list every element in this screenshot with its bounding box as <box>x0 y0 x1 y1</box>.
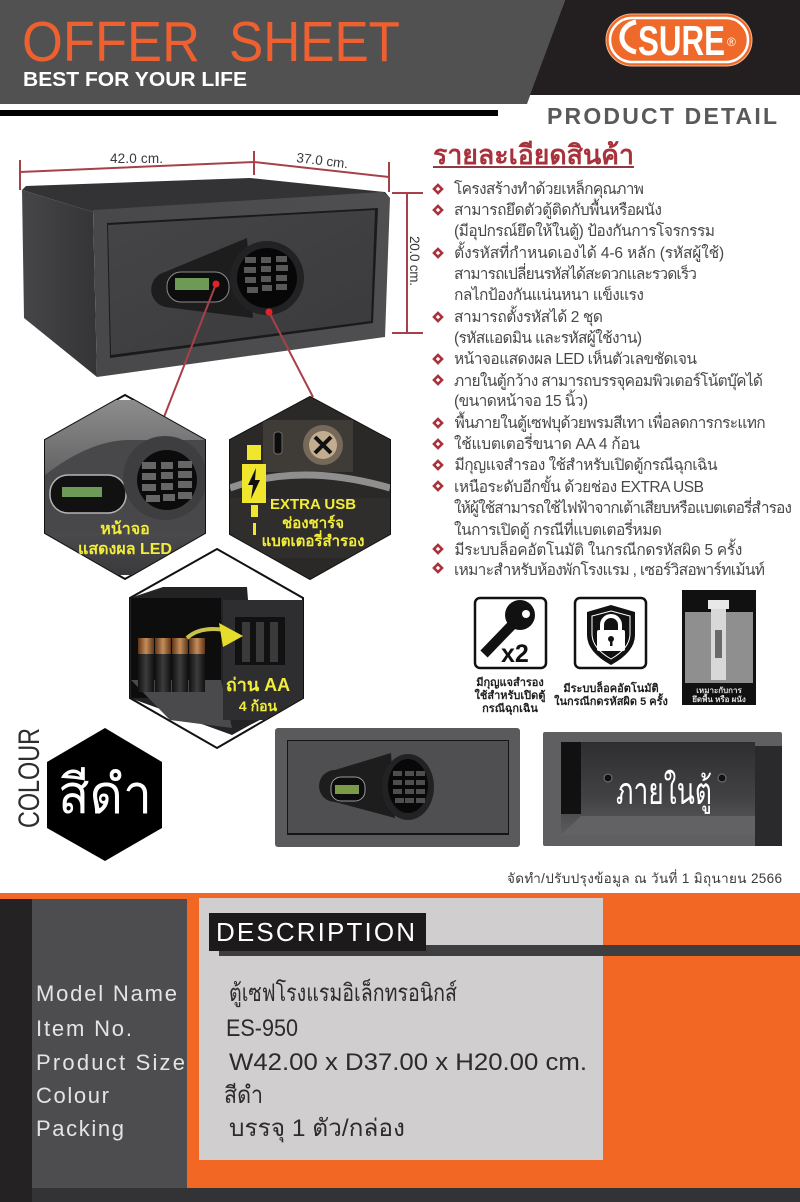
logo: SURE: SURE <box>638 17 725 64</box>
revision note: จัดทำ/ปรับปรุงข้อมูล ณ วันที่ 1 มิถุนายน 2566 <box>507 869 782 887</box>
arrow: insert batteries <box>187 623 243 647</box>
colour swatch hexagon <box>47 728 162 861</box>
list: product features: กลไกป้องกันแน่นหนา แข็งแรง <box>454 285 644 304</box>
list: product features: (รหัสแอดมิน และรหัสผู้ใช้งาน) <box>454 329 642 348</box>
list: product features: (ขนาดหน้าจอ 15 นิ้ว) <box>454 389 588 410</box>
spec labels: Packing <box>36 1116 124 1141</box>
panel: description <box>199 898 800 1160</box>
header band <box>0 0 800 116</box>
safe: interior view <box>543 732 782 846</box>
spec labels: Colour <box>36 1083 109 1108</box>
spec values: W42.00 x D37.00 x H20.00 cm. <box>229 1049 587 1076</box>
list: product features: (มีอุปกรณ์ยึดให้ในตู้) ป้องกันการโจรกรรม <box>454 222 715 241</box>
heading: product details: รายละเอียดสินค้า <box>433 140 634 170</box>
hexagon caption <box>226 675 290 714</box>
heading: description: DESCRIPTION <box>216 917 415 947</box>
label: colour: COLOUR <box>13 728 46 828</box>
hexagon: extra USB <box>230 397 390 579</box>
spec values: สีดำ <box>224 1082 263 1109</box>
icon: two keys: x2 <box>501 640 529 668</box>
spec labels: Model Name <box>36 981 177 1006</box>
caption: spare key <box>475 676 545 716</box>
list: product features: มีกุญแจสำรอง ใช้สำหรับเปิดตู้กรณีฉุกเฉิน <box>455 456 718 475</box>
hexagon caption: แบตเตอรี่สำรอง <box>262 530 364 550</box>
list: product features <box>454 179 792 579</box>
caption: spare key: กรณีฉุกเฉิน <box>482 702 538 716</box>
list: product features: ตั้งรหัสที่กำหนดเองได้ 4-6 หลัก (รหัสผู้ใช้) <box>454 241 724 263</box>
caption: spare key: ใช้สำหรับเปิดตู้ <box>475 688 545 703</box>
heading: product detail: PRODUCT DETAIL <box>547 103 777 129</box>
interior label: ภายในตู้ <box>616 770 712 814</box>
footer background <box>0 893 800 1202</box>
hexagon caption <box>262 496 364 550</box>
bolt caption: เหมาะกับการ <box>696 686 743 695</box>
bolt caption: ยึดพื้น หรือ ผนัง <box>692 693 746 704</box>
caption: auto lock <box>554 681 668 708</box>
tagline: BEST FOR YOUR LIFE <box>23 69 247 91</box>
hexagon caption: ถ่าน AA <box>226 675 290 695</box>
title: offer sheet: OFFER <box>22 10 200 74</box>
hexagon caption: ช่องชาร์จ <box>282 514 344 532</box>
list: product features: มีระบบล็อคอัตโนมัติ ในกรณีกดรหัสผิด 5 ครั้ง <box>454 538 742 559</box>
hexagon caption: แสดงผล LED <box>78 541 172 558</box>
spec labels: Item No. <box>36 1016 132 1041</box>
dimension lines <box>20 151 423 333</box>
list: product features: ในการเปิดตู้ กรณีที่แบตเตอรี่หมด <box>454 519 662 540</box>
spec labels <box>36 981 185 1141</box>
icon: two keys <box>475 598 546 668</box>
label: height: 20.0 cm. <box>407 236 422 286</box>
icon: USB charge <box>242 445 266 535</box>
list: product features: โครงสร้างทำด้วยเหล็กคุณภาพ <box>454 179 644 199</box>
spec values <box>224 978 587 1143</box>
list: product features: หน้าจอแสดงผล LED เห็นตัวเลขชัดเจน <box>454 349 697 368</box>
hexagon caption: 4 ก้อน <box>239 698 277 714</box>
list: product features: สามารถยึดตัวตู้ติดกับพื้นหรือผนัง <box>454 198 662 220</box>
hexagon caption <box>78 520 172 558</box>
list: product features: เหนือระดับอีกขั้น ด้วยช่อง EXTRA USB <box>454 475 704 496</box>
list: product features: สามารถเปลี่ยนรหัสได้สะดวกและรวดเร็ว <box>454 263 697 283</box>
list: product features: พื้นภายในตู้เซฟบุด้วยพรมสีเทา เพื่อลดการกระแทก <box>455 411 766 433</box>
hexagon caption: หน้าจอ <box>100 520 150 538</box>
lock body <box>151 238 304 318</box>
safe: main product photo <box>22 178 390 377</box>
batteries <box>138 638 205 692</box>
label: width: 42.0 cm. <box>110 151 163 166</box>
hexagon caption: EXTRA USB <box>270 496 356 513</box>
spec values: ตู้เซฟโรงแรมอิเล็กทรอนิกส์ <box>229 978 457 1008</box>
caption: auto lock: ในกรณีกดรหัสผิด 5 ครั้ง <box>554 693 668 708</box>
list: product features: เหมาะสำหรับห้องพักโรงแรม , เซอร์วิสอพาร์ทเม้นท์ <box>454 561 765 579</box>
icon: shield lock <box>575 598 646 668</box>
caption: auto lock: มีระบบล็อคอัตโนมัติ <box>563 681 659 695</box>
list: bullet markers <box>434 185 442 572</box>
title: offer sheet: SHEET <box>229 10 400 74</box>
list: product features: ภายในตู้กว้าง สามารถบรรจุคอมพิวเตอร์โน้ตบุ๊คได้ <box>454 372 763 391</box>
icon: anchor bolt <box>682 590 756 705</box>
hexagon: AA batteries <box>130 549 303 748</box>
colour swatch hexagon: สีดำ <box>58 765 152 825</box>
safe: front view <box>275 728 520 847</box>
spec labels: Product Size <box>36 1050 185 1075</box>
bolt caption <box>692 686 746 704</box>
list: product features: สามารถตั้งรหัสได้ 2 ชุด <box>454 305 603 327</box>
caption: spare key: มีกุญแจสำรอง <box>476 676 544 690</box>
callout lines <box>164 284 313 417</box>
hexagon: LED display <box>45 395 207 579</box>
spec values: ES-950 <box>226 1015 298 1042</box>
logo: SURE: ® <box>727 35 736 49</box>
logo: SURE <box>606 14 752 66</box>
list: product features: ให้ผู้ใช้สามารถใช้ไฟฟ้าจากเต้าเสียบหรือแบตเตอรี่สำรอง <box>454 497 792 518</box>
label: depth: 37.0 cm. <box>296 150 349 171</box>
list: product features: ใช้แบตเตอรี่ขนาด AA 4 ก้อน <box>454 433 640 453</box>
spec values: บรรจุ 1 ตัว/กล่อง <box>229 1115 405 1143</box>
callout dots <box>212 280 272 316</box>
